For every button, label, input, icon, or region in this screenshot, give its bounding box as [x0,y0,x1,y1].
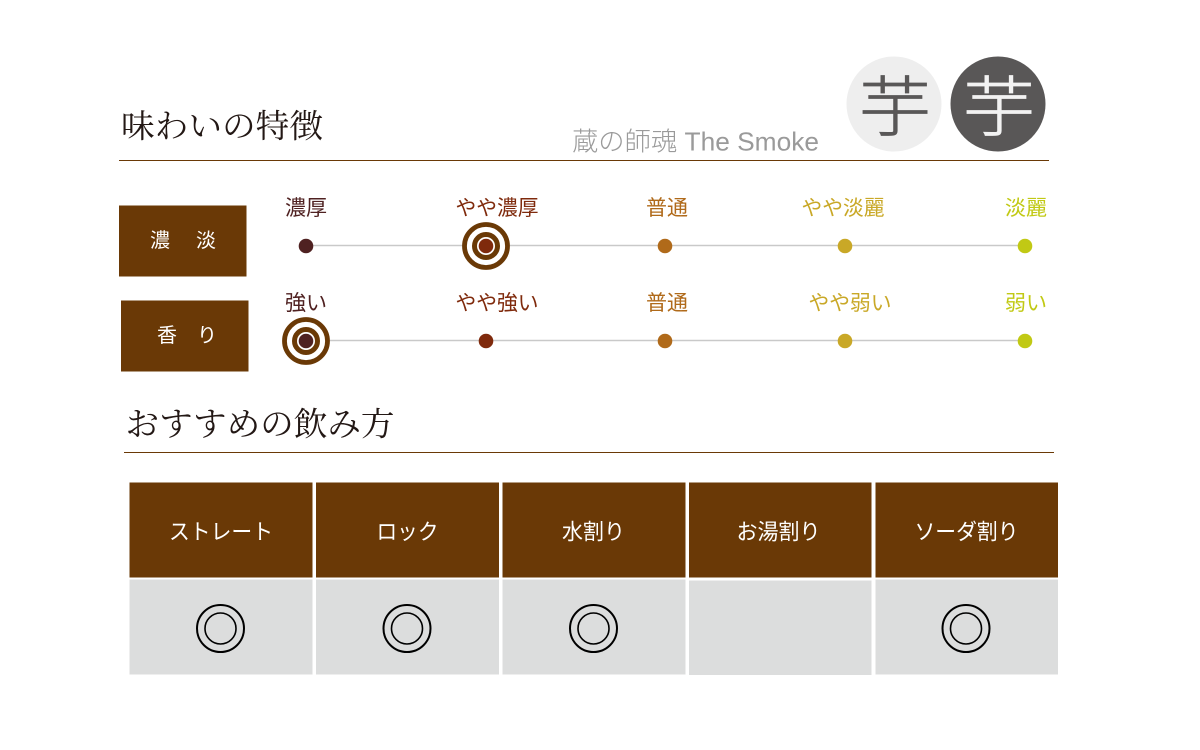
scale labels: aroma: やや弱い [808,292,892,315]
scale labels: aroma [285,292,1047,315]
panel: with soda [876,482,1058,674]
scale labels: richness: やや濃厚 [456,197,538,220]
scale labels: richness: やや淡麗 [802,197,884,220]
icon: double circle [384,605,430,652]
scale labels: aroma: 弱い [1005,292,1047,315]
icon: imo light badge: 芋 [859,71,931,145]
panel: with water: 水割り [562,520,625,544]
label: richness: 濃 [150,229,170,252]
panel: straight: ストレート [169,520,273,544]
scale labels: aroma: 普通 [646,292,688,315]
product name: 蔵の師魂 The Smoke [572,126,819,156]
panel: with hot water: お湯割り [736,520,820,544]
heading: taste characteristics: 味わいの特徴 [121,108,323,146]
scale labels: richness: 淡麗 [1005,197,1047,220]
scale labels: richness: 普通 [646,197,688,220]
panel: rock [316,482,499,674]
icon: imo dark badge [950,56,1046,152]
icon: double circle [570,605,617,652]
label: aroma: り [197,325,217,347]
label: richness: 淡 [196,230,216,252]
panel: straight [130,482,312,674]
panel: with soda: ソーダ割り [914,520,1018,544]
panel: rock: ロック [376,520,438,544]
label: aroma [121,300,248,372]
panel: with water [502,482,686,674]
scale labels: aroma: 強い [285,292,327,315]
label: aroma: 香 [157,324,177,347]
panel: richness row [119,197,1047,276]
scale points: richness [299,224,1032,268]
scale points: aroma [284,320,1032,362]
icon: double circle [942,605,990,652]
icon: double circle [197,605,244,652]
scale labels: aroma: やや強い [456,292,538,315]
scale labels: richness: 濃厚 [285,197,327,220]
label: richness [119,206,246,276]
icon: imo dark badge: 芋 [963,71,1035,145]
panel: aroma row [121,292,1047,372]
panel: with hot water [689,482,872,675]
scale labels: richness [285,197,1047,220]
icon: imo light badge [846,56,942,152]
heading: recommended ways to drink: おすすめの飲み方 [126,406,394,444]
